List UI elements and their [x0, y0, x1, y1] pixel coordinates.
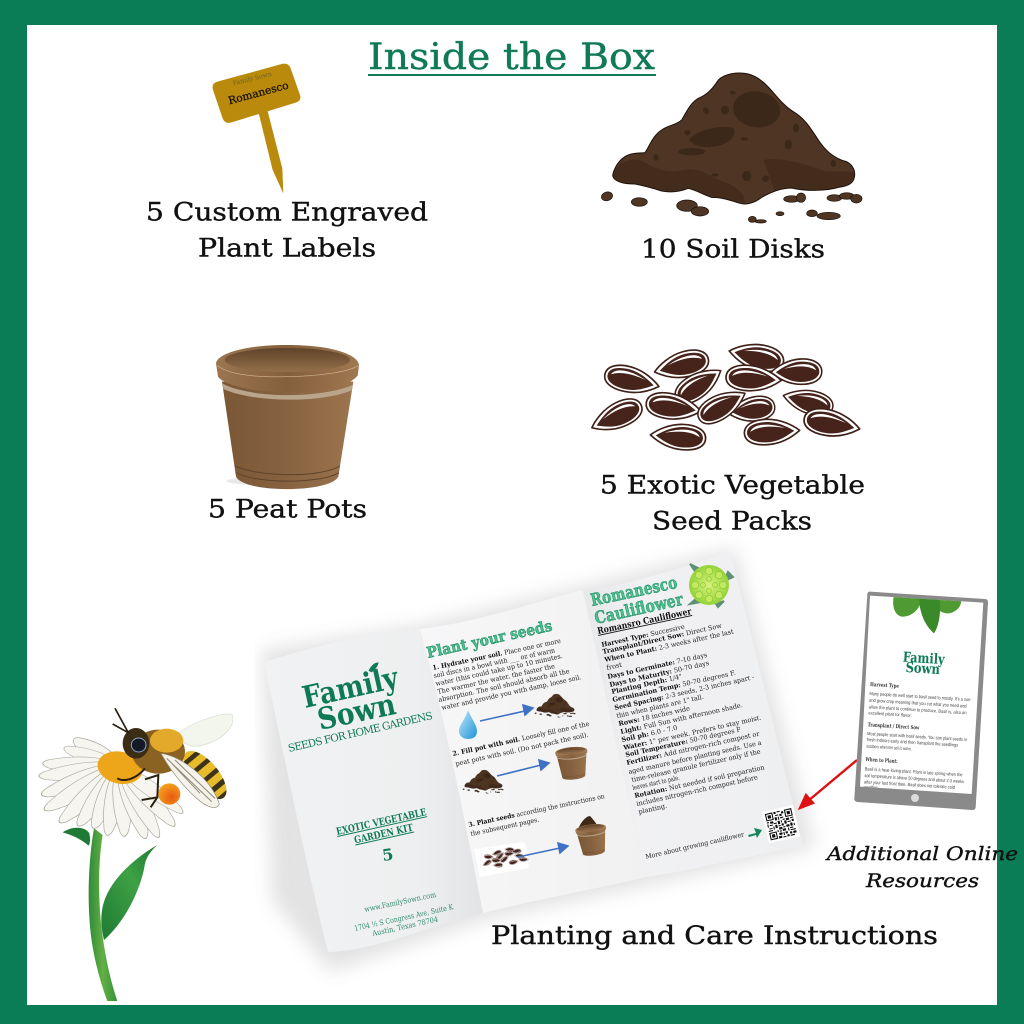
step 1 text: The warmer the water, the faster the [437, 662, 556, 696]
tablet text: after your last frost date. Basil does not tolerate cold [864, 779, 955, 790]
label: plant labels: Plant Labels [198, 234, 376, 264]
growing details: Germination Temp: 50-70 degrees F. [612, 669, 736, 704]
bee head [113, 708, 149, 759]
growing details: leaves start to pale. [632, 774, 680, 792]
panel: plant your seeds [420, 590, 647, 913]
tablet text: outdoors when the soil is warm. [866, 744, 912, 751]
growing details: Soil ph: 6.0 - 7.0 [621, 724, 678, 744]
tablet text: Most people start with basil seeds. You can plant seeds in [867, 731, 968, 742]
address: 1704 ½ S Congress Ave, Suite K [353, 902, 454, 933]
growing details: When to Plant: 2-3 weeks after the last [603, 627, 735, 664]
growing details: Soil Temperature: 50-70 degrees F [625, 726, 742, 759]
tablet text: excellent plant for flavor. [868, 710, 912, 718]
icon: water drop [459, 710, 477, 739]
growing details: Harvest Type: Successive [601, 623, 686, 649]
step 3 text: the subsequent pages. [470, 816, 540, 838]
bee abdomen [184, 751, 226, 799]
kit title [335, 807, 428, 865]
growing details: includes nitrogen-rich compost before [636, 773, 759, 808]
item: peat pots [208, 345, 367, 524]
heading: Plant your seeds [425, 617, 554, 662]
arrow [480, 705, 533, 721]
growing details: Transplant/Direct Sow: Direct Sow [602, 622, 723, 656]
leaves [893, 595, 961, 633]
icon: plant label stake: Family Sown [232, 70, 273, 87]
label: soil disks: 10 Soil Disks [641, 234, 825, 264]
kit title: GARDEN KIT [353, 823, 415, 846]
tablet text: and grow crop meaning that you cut what you need and [869, 698, 967, 709]
icon: soil pile [600, 73, 862, 223]
bee lower wing [161, 753, 219, 808]
label: peat pots: 5 Peat Pots [208, 494, 367, 524]
label: seed packs: Seed Packs [652, 506, 812, 536]
home button [911, 794, 919, 802]
caption: planting and care instructions: Planting and Care Instructions [491, 921, 938, 951]
logo [287, 660, 434, 755]
QR code [762, 805, 800, 843]
icon: seeds small [474, 842, 529, 877]
address: www.FamilySown.com [364, 890, 437, 914]
icon: soil small [463, 770, 503, 793]
subheading: Romansro Cauliflower [597, 607, 693, 637]
icon: plant label stake [213, 64, 300, 193]
step 2 text: peat pots with soil. (Do not pack the soil). [455, 731, 589, 768]
tablet text: When to Plant: [864, 757, 898, 765]
daisy petals [38, 732, 187, 842]
logo: Family [299, 660, 403, 716]
growing details: thin when plants are 1" tall. [616, 693, 704, 720]
tablet text: allow the plant to continue to produce. Basil is, also an [869, 704, 967, 715]
caption: additional online resources [825, 843, 1018, 892]
growing details: Rows: 18 inches wide [618, 704, 691, 728]
bee thorax [132, 730, 185, 774]
tablet text: weather. [864, 784, 879, 790]
icon: peat pot [216, 345, 359, 489]
item: plant labels [146, 64, 428, 264]
arrow [497, 760, 549, 776]
tablet text: Transplant / Direct Sow [868, 722, 920, 732]
heading [589, 573, 686, 629]
tablet text: soil temperature is above 50 degrees and about 2-3 weeks [864, 773, 965, 784]
brochure shadow [262, 548, 815, 972]
caption: additional online resources: Additional Online [825, 843, 1018, 865]
bee upper wing [176, 714, 233, 746]
label: plant labels: 5 Custom Engraved [146, 198, 428, 228]
growing details: Rotation: Not needed if soil preparation [634, 763, 766, 800]
step 1 text: absorption. The soil should absorb all the [438, 667, 570, 704]
arrow: green [748, 828, 762, 838]
icon: plant label stake: Romanesco [227, 79, 290, 107]
item: soil disks [600, 73, 862, 264]
tablet text: Harvest Type [870, 682, 900, 690]
step 1 text: 1. Hydrate your soil. Place one or more [432, 637, 562, 672]
growing details: Days to Germinate: 7-10 days [607, 651, 709, 681]
growing details: Seed Spacing: 2-3 seeds, 2-3 inches apart - [614, 673, 755, 712]
step 3 text: 3. Plant seeds according the instructions on [468, 792, 606, 829]
tablet [854, 592, 988, 810]
stem [89, 828, 117, 1001]
step 1 text: soil discs in a bowl with ___ oz of warm [433, 646, 556, 680]
heading: Romanesco [589, 573, 679, 611]
step 1 text: water and provide you with damp, loose soil. [441, 673, 582, 712]
panel: cover [264, 629, 483, 952]
arrow: red pointer to tablet [800, 760, 857, 808]
label: seed packs [600, 470, 865, 536]
heading: Cauliflower [593, 590, 686, 629]
icon: pot with soil [575, 816, 610, 857]
growing details: time-release granule fertilizer only if the [631, 748, 761, 784]
step 1 text: water (this could take up to 10 minutes. [435, 652, 563, 688]
kit title: 5 [381, 845, 395, 865]
more about link: More about growing cauliflower [645, 830, 746, 861]
step 2 text: 2. Fill pot with soil. Loosely fill one of the [452, 720, 590, 758]
tablet text: Many people do well start to basil seed to mostly. It's a sun- [869, 691, 972, 702]
item: seed packs [587, 338, 865, 536]
logo: Sown [905, 660, 940, 678]
icon: pot small [555, 745, 590, 781]
address: Austin, Texas 78704 [371, 915, 439, 938]
growing details: Days to Maturity: 50-70 days [609, 659, 711, 689]
label: seed packs: 5 Exotic Vegetable [600, 470, 865, 500]
growing details: aged manure before planting seeds. Use a [628, 739, 762, 776]
tablet text [864, 682, 972, 790]
illustration: bee on daisy [38, 708, 235, 1001]
logo: Sown [314, 687, 399, 738]
tablet text: fresh indoors early and then transplant the seedlings [867, 737, 959, 748]
logo [903, 652, 945, 674]
growing details: frost [606, 661, 623, 672]
leaves [63, 828, 157, 940]
arrow [518, 843, 568, 857]
label: plant labels [146, 198, 428, 264]
growing details: Planting Depth: 1/4" [611, 673, 683, 696]
kit title: EXOTIC VEGETABLE [335, 807, 428, 838]
growing details [601, 622, 766, 816]
tablet body [854, 592, 988, 810]
title: Inside the Box [368, 37, 655, 78]
caption: additional online resources: Resources [865, 870, 979, 892]
icon: soil small [535, 694, 575, 717]
growing details: Light: Full Sun with afternoon shade. [620, 701, 743, 736]
growing details: planting. [638, 802, 668, 816]
bee legs and pollen [117, 768, 180, 807]
brochure [262, 548, 815, 972]
logo: Family [902, 650, 946, 668]
logo: SEEDS FOR HOME GARDENS [287, 710, 434, 755]
panel: romanesco [583, 552, 803, 877]
step 1 text [432, 637, 582, 712]
icon: romanesco [689, 564, 733, 607]
address [353, 890, 454, 938]
tablet text: Basil is a heat-loving plant. Plant in late spring when the [865, 766, 963, 777]
growing details: Fertilizer: Add nitrogen-rich compost or [626, 730, 761, 767]
daisy centre [95, 747, 145, 788]
growing details: Water: 1" per week. Prefers to stay moist. [622, 714, 762, 752]
icon: seeds [587, 338, 862, 452]
